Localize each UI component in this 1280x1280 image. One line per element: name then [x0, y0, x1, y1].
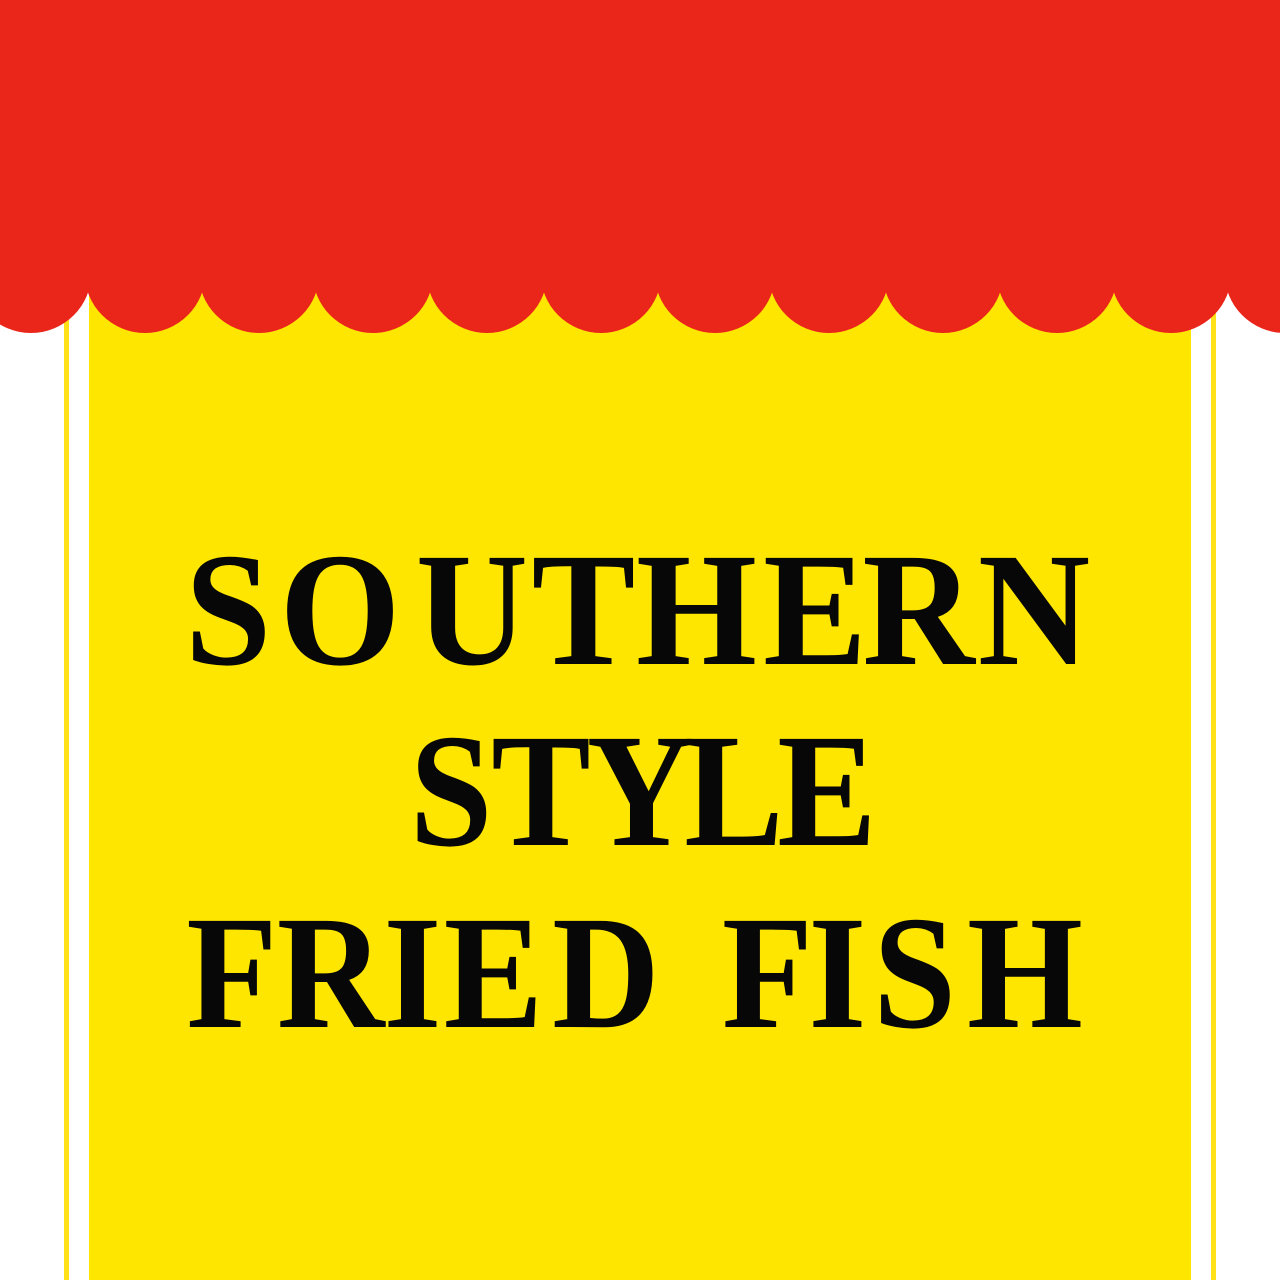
title: SOUTHERN — [185, 521, 1090, 700]
panel: yellow sign board — [89, 280, 1191, 1280]
red scalloped awning — [0, 0, 1280, 333]
left thin yellow post — [64, 300, 69, 1280]
right thin yellow post — [1211, 300, 1216, 1280]
title: STYLE — [410, 700, 877, 880]
title: FRIED FISH — [186, 882, 1083, 1062]
title — [185, 521, 1090, 1062]
